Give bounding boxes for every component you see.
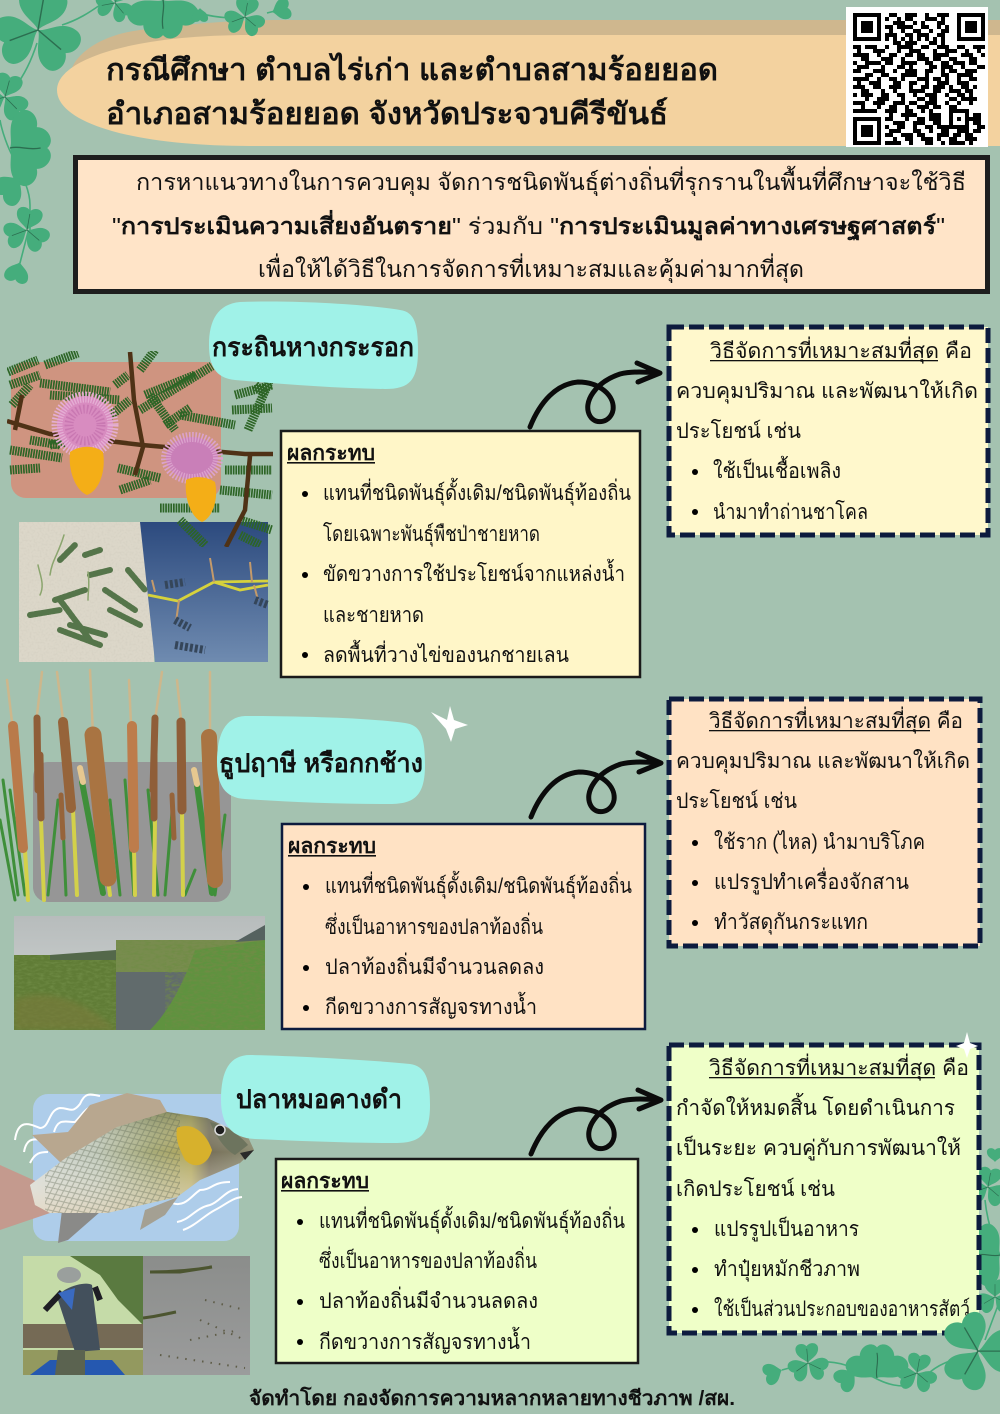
title banner [57, 20, 1000, 146]
title: กรณีศึกษา ตำบลไร่เก่า และตำบลสามร้อยยอด [106, 52, 718, 87]
panel: วิธีจัดการ 2: แปรรูปทำเครื่องจักสาน [714, 867, 909, 895]
panel: ผลกระทบ 3: ปลาท้องถิ่นมีจำนวนลดลง [319, 1286, 538, 1313]
heading: ธูปฤาษี [217, 716, 425, 804]
panel: ผลกระทบ 1: แทนที่ชนิดพันธุ์ดั้งเดิม/ชนิดพันธุ์ท้องถิ่น [323, 478, 631, 506]
heading: ธูปฤาษี: ธูปฤาษี หรือกกช้าง [219, 748, 423, 780]
panel: วิธีจัดการ 3 [669, 1045, 979, 1333]
panel: ผลกระทบ 1: ขัดขวางการใช้ประโยชน์จากแหล่งน้ำ [323, 559, 625, 586]
title: อำเภอสามร้อยยอด จังหวัดประจวบคีรีขันธ์ [106, 97, 668, 131]
panel: วิธีจัดการ 2: วิธีจัดการที่เหมาะสมที่สุด คือ [709, 706, 963, 734]
panel: วิธีจัดการ 2: ใช้ราก (ไหล) นำมาบริโภค [714, 830, 925, 854]
panel: ผลกระทบ 2: ผลกระทบ [288, 835, 376, 858]
photo: wetland right [116, 916, 265, 1030]
panel: ผลกระทบ 3 [276, 1159, 638, 1363]
panel: ผลกระทบ 2: ซึ่งเป็นอาหารของปลาท้องถิ่น [325, 912, 543, 939]
panel: วิธีจัดการ 1: นำมาทำถ่านชาโคล [713, 500, 868, 524]
icon: large clover at corner [922, 1297, 1000, 1405]
panel: ผลกระทบ 1: ผลกระทบ [287, 442, 375, 465]
illustration: cattails [0, 670, 225, 900]
panel: ผลกระทบ 2: กีดขวางการสัญจรทางน้ำ [325, 992, 537, 1019]
panel: วิธีจัดการ 3: กำจัดให้หมดสิ้น โดยดำเนินการ [676, 1093, 955, 1120]
panel: ปลาหมอคางดำ images [0, 1093, 255, 1375]
panel: ผลกระทบ 3: ผลกระทบ [281, 1170, 369, 1193]
panel: กระถินหางกระรอก images [7, 350, 273, 662]
clover decoration: bottom right [761, 1148, 1000, 1396]
panel: ผลกระทบ 1: โดยเฉพาะพันธุ์พืชป่าชายหาด [323, 522, 540, 547]
panel: วิธีจัดการ 1: วิธีจัดการที่เหมาะสมที่สุด คือ [710, 336, 972, 364]
sparkle [956, 1032, 978, 1058]
QR code [846, 7, 989, 147]
panel: วิธีจัดการ 3: เป็นระยะ ควบคู่กับการพัฒนาให้ [676, 1134, 961, 1161]
panel: วิธีจัดการ 2: ประโยชน์ เช่น [676, 789, 797, 813]
clover decoration: top left [0, 0, 293, 285]
panel: วิธีจัดการ 3: วิธีจัดการที่เหมาะสมที่สุด คือ [709, 1053, 969, 1081]
panel: ผลกระทบ 1 [281, 431, 640, 677]
intro box: เพื่อให้ได้วิธีในการจัดการที่เหมาะสมและคุ้มค่ามากที่สุด [258, 253, 804, 283]
title [106, 52, 718, 131]
panel: ผลกระทบ 2: แทนที่ชนิดพันธุ์ดั้งเดิม/ชนิดพันธุ์ท้องถิ่น [325, 871, 632, 899]
heading: กระถินหางกระรอก [209, 302, 418, 389]
intro box: "การประเมินความเสี่ยงอันตราย " ร่วมกับ " การประเมินมูลค่าทางเศรษฐศาสตร์ " [112, 209, 945, 241]
panel: ธูปฤาษี images [0, 670, 231, 902]
heading: ปลาหมอคางดำ [221, 1055, 430, 1143]
panel: วิธีจัดการ 2 [669, 699, 980, 946]
arrow 3 [531, 1090, 661, 1154]
panel: วิธีจัดการ 2: ทำวัสดุกันกระแทก [714, 911, 868, 935]
photo: wetland left [14, 916, 116, 1030]
illustration: blackchin tilapia fish [0, 1093, 255, 1243]
intro box: การหาแนวทางในการควบคุม จัดการชนิดพันธุ์ต่างถิ่นที่รุกรานในพื้นที่ศึกษาจะใช้วิธี [136, 166, 966, 196]
photo: sand and thorn branch [19, 522, 268, 662]
panel: วิธีจัดการ 2: ควบคุมปริมาณ และพัฒนาให้เกิด [676, 749, 970, 774]
panel: วิธีจัดการ 1 [669, 327, 988, 535]
panel: ผลกระทบ 1: และชายหาด [323, 604, 424, 627]
panel: วิธีจัดการ 3: เกิดประโยชน์ เช่น [676, 1177, 835, 1201]
footer credit: จัดทำโดย กองจัดการความหลากหลายทางชีวภาพ /สผ. [249, 1386, 735, 1410]
arrow 2 [531, 753, 661, 817]
photo: man with net [23, 1256, 143, 1375]
panel: ผลกระทบ 3: ซึ่งเป็นอาหารของปลาท้องถิ่น [319, 1246, 537, 1273]
panel: วิธีจัดการ 1: ควบคุมปริมาณ และพัฒนาให้เกิด [676, 379, 978, 404]
panel: ผลกระทบ 2 [282, 824, 645, 1029]
intro box [76, 158, 988, 292]
panel: ผลกระทบ 2: ปลาท้องถิ่นมีจำนวนลดลง [325, 952, 544, 979]
photo: water with fish fry [143, 1256, 250, 1375]
panel: วิธีจัดการ 1: ใช้เป็นเชื้อเพลิง [713, 456, 841, 483]
sparkle [431, 706, 468, 742]
panel: ผลกระทบ 1: ลดพื้นที่วางไข่ของนกชายเลน [323, 640, 569, 667]
panel: วิธีจัดการ 3: ทำปุ๋ยหมักชีวภาพ [714, 1258, 860, 1282]
panel: วิธีจัดการ 1: ประโยชน์ เช่น [676, 419, 801, 443]
panel: ผลกระทบ 3: กีดขวางการสัญจรทางน้ำ [319, 1327, 531, 1354]
arrow 1 [530, 363, 660, 427]
icon: water squiggles [15, 1094, 242, 1230]
heading: กระถินหางกระรอก: กระถินหางกระรอก [212, 332, 414, 362]
illustration: flowering branch [7, 350, 273, 547]
panel: วิธีจัดการ 3: แปรรูปเป็นอาหาร [714, 1215, 859, 1242]
panel: ผลกระทบ 3: แทนที่ชนิดพันธุ์ดั้งเดิม/ชนิดพันธุ์ท้องถิ่น [319, 1206, 625, 1234]
heading: ปลาหมอคางดำ: ปลาหมอคางดำ [236, 1084, 402, 1114]
